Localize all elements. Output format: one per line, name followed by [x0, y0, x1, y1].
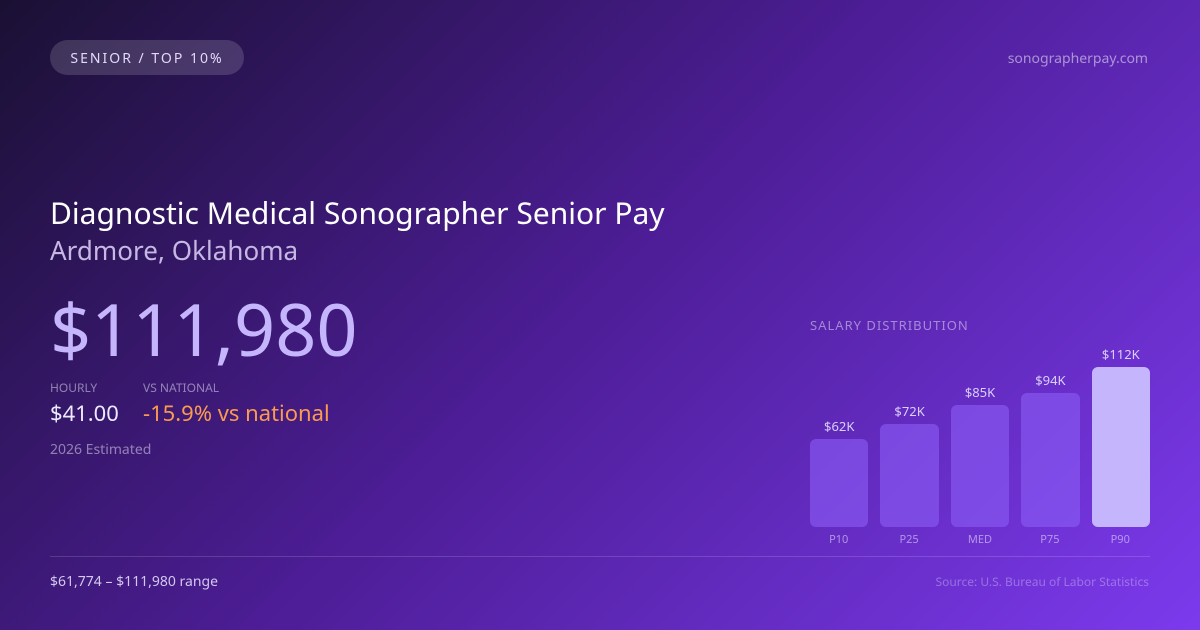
chart heading: SALARY DISTRIBUTION	[810, 316, 969, 334]
main salary figure: $111,980	[50, 280, 358, 378]
bar: P25	[880, 424, 939, 527]
year note: 2026 Estimated	[50, 440, 151, 459]
stat: hourly	[50, 379, 119, 428]
title: Diagnostic Medical Sonographer Senior Pay	[50, 192, 665, 233]
vs national value: -15.9% vs national	[143, 398, 330, 428]
bar: median	[951, 405, 1009, 527]
bar value: P75: $94K	[1035, 371, 1066, 389]
bar label: P90: P90	[1111, 532, 1130, 547]
salary range: $61,774 – $111,980 range	[50, 572, 218, 591]
bar label: P75: P75	[1040, 532, 1060, 547]
badge: senior / top 10%	[50, 40, 244, 75]
bar chart: salary distribution	[810, 345, 1150, 547]
bar label: median: MED	[968, 532, 992, 547]
bar value: median: $85K	[965, 383, 995, 401]
bar: P75	[1021, 393, 1080, 527]
stat: vs national	[143, 379, 330, 428]
hourly value: $41.00	[50, 398, 119, 428]
bar value: P10: $62K	[824, 417, 854, 435]
bar label: P10: P10	[829, 532, 848, 547]
bar value: P90: $112K	[1102, 345, 1140, 363]
bar: P90 highlighted	[1092, 367, 1150, 527]
badge: senior / top 10%: SENIOR / TOP 10%	[70, 49, 224, 68]
vs national label: VS NATIONAL	[143, 379, 219, 396]
bar value: P25: $72K	[894, 402, 925, 420]
bar: P10	[810, 439, 868, 527]
bar label: P25: P25	[899, 532, 919, 547]
source note: Source: U.S. Bureau of Labor Statistics	[936, 573, 1149, 590]
site name: sonographerpay.com	[1008, 49, 1148, 68]
subtitle: location: Ardmore, Oklahoma	[50, 232, 298, 268]
hourly label: HOURLY	[50, 379, 97, 396]
